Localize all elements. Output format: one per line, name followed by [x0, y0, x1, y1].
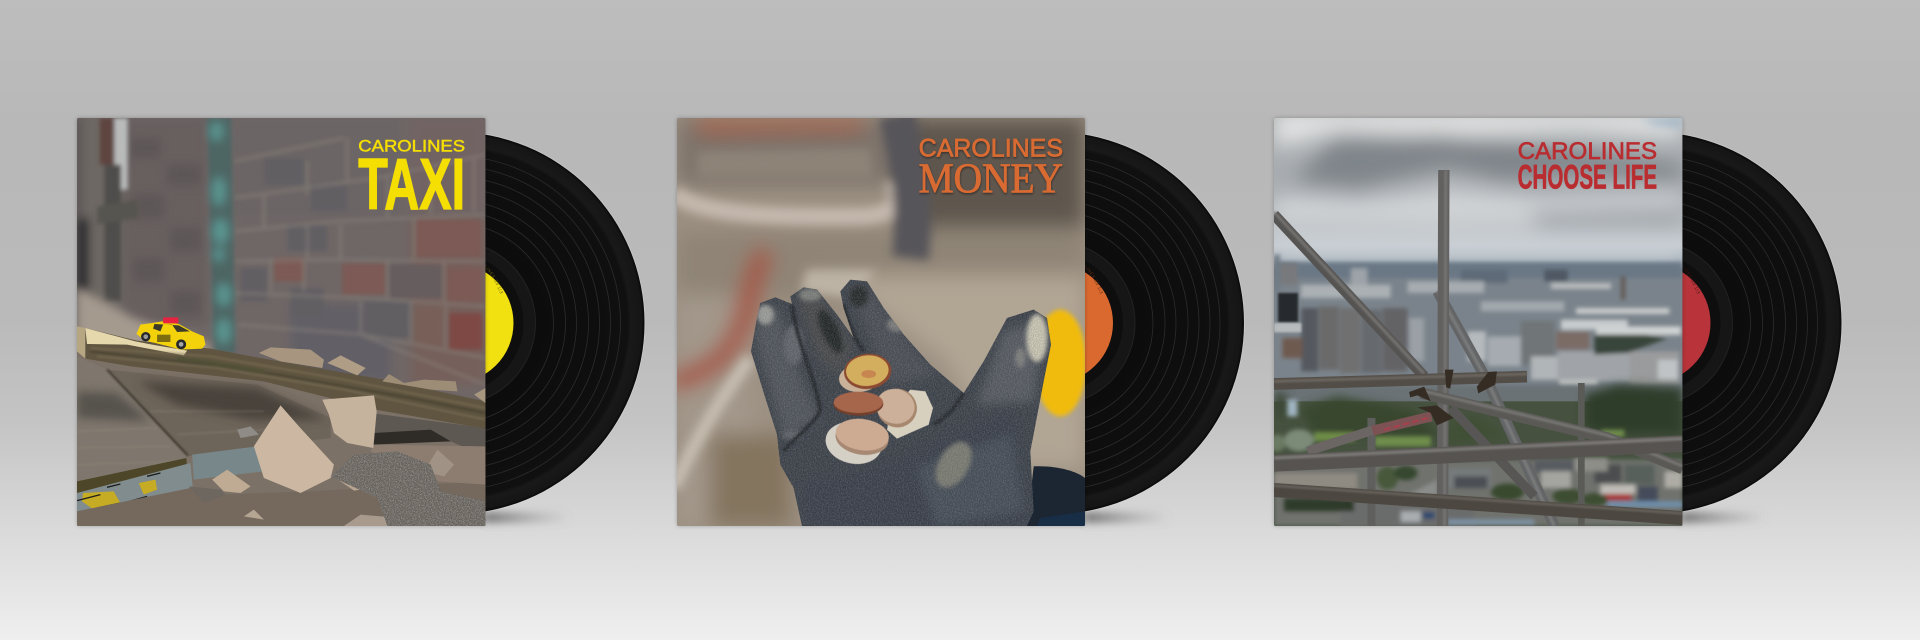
panel: Money album — [675, 116, 1245, 528]
vinyl shadow — [1682, 512, 1767, 523]
vinyl record: Money: VINYL RECORD GROOVE LINES 33 1/3 — [1085, 265, 1103, 294]
album name: TAXI — [358, 145, 465, 225]
album name: CHOOSE LIFE — [1518, 159, 1657, 197]
scaffold tubes — [1274, 170, 1682, 526]
gap behind rubble — [374, 414, 486, 446]
panel: Taxi album — [75, 116, 646, 528]
vinyl record: Taxi — [485, 134, 646, 512]
title: CAROLINES TAXI — [358, 140, 464, 210]
upper ledge — [77, 284, 216, 352]
title: CAROLINES CHOOSE LIFE — [1518, 142, 1656, 190]
coins — [822, 352, 933, 469]
scaffold clamps — [1409, 370, 1497, 425]
floor boards — [77, 351, 485, 526]
album cover: Taxi — [77, 118, 486, 526]
timber plank — [77, 326, 85, 359]
vinyl shadow — [1085, 512, 1170, 523]
vinyl record: Choose Life: VINYL RECORD GROOVE LINES 33 1/3 — [1682, 265, 1700, 294]
title: CAROLINES MONEY — [919, 138, 1064, 196]
band name: CAROLINES — [358, 136, 465, 155]
broken concrete chunks — [322, 395, 377, 448]
panel: Choose Life album — [1272, 116, 1842, 528]
lower buildings — [1274, 460, 1682, 526]
verdigris pipe — [207, 118, 235, 353]
gloved hand — [751, 280, 1051, 526]
vinyl record: Choose Life — [1682, 134, 1842, 512]
rocks on plank — [259, 347, 324, 368]
photo: sky and city skyline — [1269, 111, 1682, 526]
album name: MONEY — [919, 156, 1063, 203]
vinyl record: Taxi: VINYL RECORD GROOVE LINES 33 1/3 — [486, 265, 503, 294]
rubble — [331, 451, 485, 526]
photo: blurred site background — [674, 115, 1086, 526]
city — [1274, 268, 1682, 401]
album cover: Choose Life — [1269, 111, 1682, 526]
photo: brick wall and toy taxi on timber — [77, 118, 485, 526]
vinyl record: Money — [1085, 134, 1245, 512]
band name: CAROLINES — [1518, 138, 1657, 165]
greenery and river — [1274, 385, 1682, 405]
band name: CAROLINES — [919, 136, 1063, 163]
album cover: Money — [674, 115, 1086, 526]
toy taxi — [136, 317, 205, 350]
vinyl shadow — [485, 512, 570, 523]
